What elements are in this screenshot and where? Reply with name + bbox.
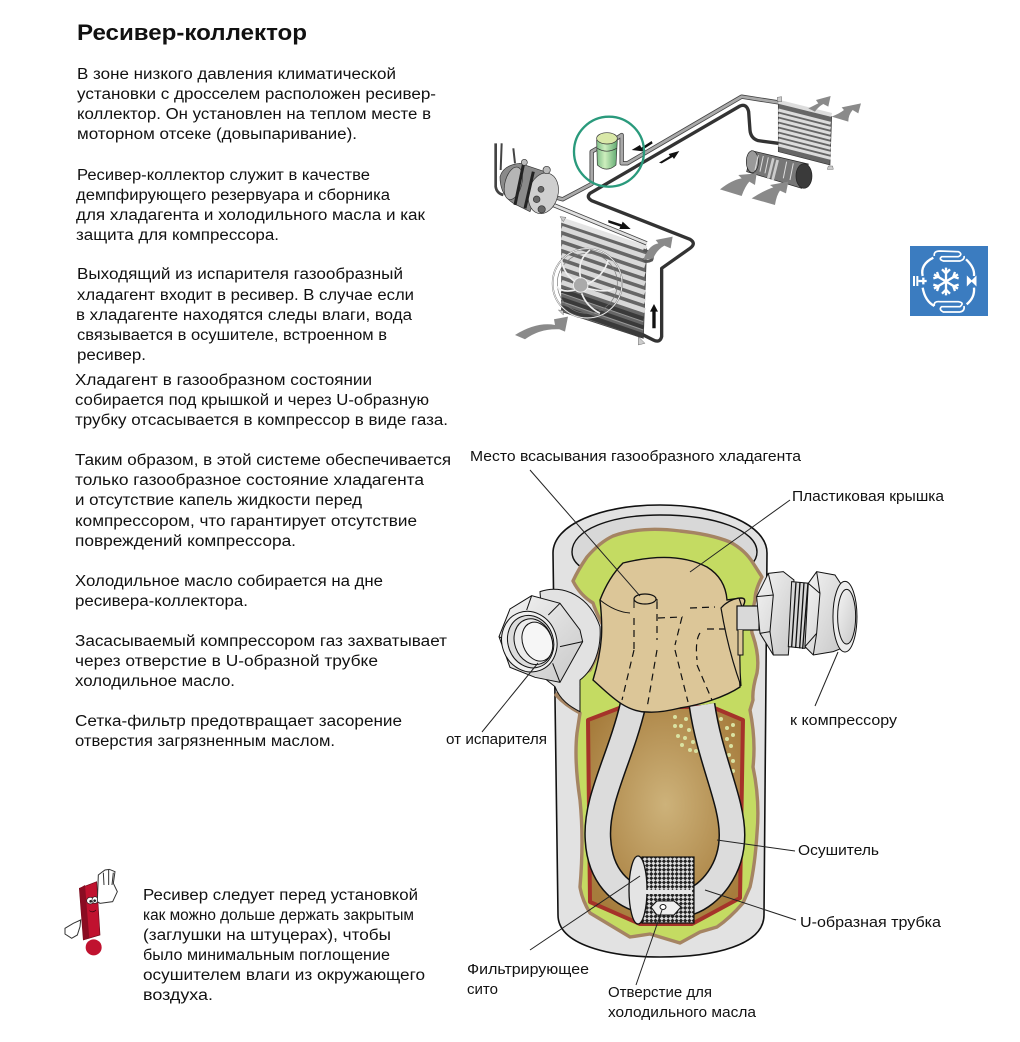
high pressure pipe <box>588 105 778 341</box>
text block: compressor protection: компрессором, что гарантирует отсутствие <box>75 513 417 530</box>
text block: purpose: для хладагента и холодильного масла и как <box>76 207 425 224</box>
callout leader lines <box>482 470 838 985</box>
oil dots <box>673 715 735 773</box>
evaporator <box>777 97 833 169</box>
text block: gaseous refrigerant <box>75 372 448 429</box>
label: filter sieve: Фильтрирующее <box>467 962 589 978</box>
label: plastic cap: Пластиковая крышка <box>792 489 945 505</box>
text block: warning: Ресивер следует перед установкой <box>143 887 418 904</box>
text block: oil <box>75 573 383 610</box>
text block: gaseous refrigerant: собирается под крышкой и через U-образную <box>75 392 429 409</box>
text block: filter mesh <box>75 713 402 750</box>
text block: compressor protection: Таким образом, в этой системе обеспечивается <box>75 452 451 469</box>
text block: warning: было минимальным поглощение <box>143 947 390 964</box>
air flow arrows <box>515 96 861 339</box>
low pressure pipe <box>547 97 780 199</box>
label: suction point: Место всасывания газообразного хладагента <box>470 449 802 465</box>
text block: moisture: связывается в осушителе, встроенном в <box>77 327 387 344</box>
system diagram: air conditioning circuit <box>496 96 861 345</box>
text block: warning: воздуха. <box>143 987 213 1004</box>
text block: gaseous refrigerant: трубку отсасывается в компрессор в виде газа. <box>75 412 448 429</box>
label: from evaporator: от испарителя <box>446 732 547 748</box>
text block: moisture: Выходящий из испарителя газообразный <box>77 266 403 283</box>
icon: blue climate system badge <box>910 246 988 316</box>
text block: low pressure location: моторном отсеке (довыпаривание). <box>77 126 357 143</box>
text block: low pressure location: коллектор. Он установлен на теплом месте в <box>77 106 431 123</box>
label: to compressor: к компрессору <box>790 713 898 729</box>
receiver component <box>597 133 617 169</box>
text block: oil intake: Засасываемый компрессором газ захватывает <box>75 633 447 650</box>
text block: compressor protection: повреждений компрессора. <box>75 533 296 550</box>
highlight circle <box>574 117 644 187</box>
text block: oil intake: холодильное масло. <box>75 673 235 690</box>
inlet fitting <box>493 589 600 712</box>
dashed tube lines on cap <box>622 602 725 708</box>
text block: moisture <box>76 266 414 364</box>
text block: moisture: ресивер. <box>77 347 146 364</box>
tube stub to outlet <box>721 598 743 686</box>
fan <box>553 249 622 318</box>
text block: oil intake <box>75 633 447 690</box>
cutaway wall <box>556 529 762 943</box>
plastic cap <box>593 558 745 712</box>
text block: low pressure location: В зоне низкого давления климатической <box>77 66 396 83</box>
outlet fitting <box>757 572 857 655</box>
text block: warning <box>143 887 425 1004</box>
text block: filter mesh: отверстия загрязненным маслом. <box>75 733 335 750</box>
label: filter sieve <box>467 962 589 998</box>
text block: compressor protection <box>75 452 451 550</box>
text block: warning: (заглушки на штуцерах), чтобы <box>143 927 391 944</box>
cutaway diagram: receiver-collector <box>493 505 857 957</box>
text block: low pressure location: установки с дросселем расположен ресивер- <box>77 86 436 103</box>
label: dryer: Осушитель <box>798 843 879 859</box>
text block: compressor protection: и отсутствие капель жидкости перед <box>75 492 362 509</box>
cylinder body <box>553 505 767 957</box>
text block: low pressure location <box>77 66 436 143</box>
dryer housing <box>588 707 743 924</box>
text block: oil: ресивера-коллектора. <box>75 593 248 610</box>
text block: filter mesh: Сетка-фильтр предотвращает засорение <box>75 713 402 730</box>
U-shaped tube <box>598 705 732 902</box>
label: oil hole: Отверстие для <box>608 985 712 1001</box>
condenser <box>553 205 652 345</box>
flow direction arrows <box>608 141 679 328</box>
label: U-tube: U-образная трубка <box>800 915 942 931</box>
blower <box>746 151 812 188</box>
label: oil hole <box>608 985 757 1021</box>
text block: purpose: Ресивер-коллектор служит в качестве <box>77 167 370 184</box>
text block: moisture: хладагент входит в ресивер. В случае если <box>77 287 414 304</box>
text block: warning: осушителем влаги из окружающего <box>143 967 425 984</box>
text block: moisture: в хладагенте находятся следы влаги, вода <box>76 307 412 324</box>
text block: gaseous refrigerant: Хладагент в газообразном состоянии <box>75 372 372 389</box>
text block: warning: как можно дольше держать закрытым <box>143 907 414 924</box>
label: oil hole: холодильного масла <box>608 1005 757 1021</box>
title: Ресивер-коллектор <box>77 20 307 45</box>
filter sieve <box>629 856 694 924</box>
compressor <box>496 143 563 217</box>
icon: red exclamation mark character <box>65 869 117 955</box>
text block: oil intake: через отверстие в U-образной трубке <box>75 653 378 670</box>
text block: purpose: демпфирующего резервуара и сборника <box>76 187 390 204</box>
label: filter sieve: сито <box>467 982 498 998</box>
top opening ring <box>572 515 757 580</box>
text block: oil: Холодильное масло собирается на дне <box>75 573 383 590</box>
text block: compressor protection: только газообразное состояние хладагента <box>75 472 424 489</box>
text block: purpose: защита для компрессора. <box>76 227 279 244</box>
text block: purpose <box>76 167 425 244</box>
